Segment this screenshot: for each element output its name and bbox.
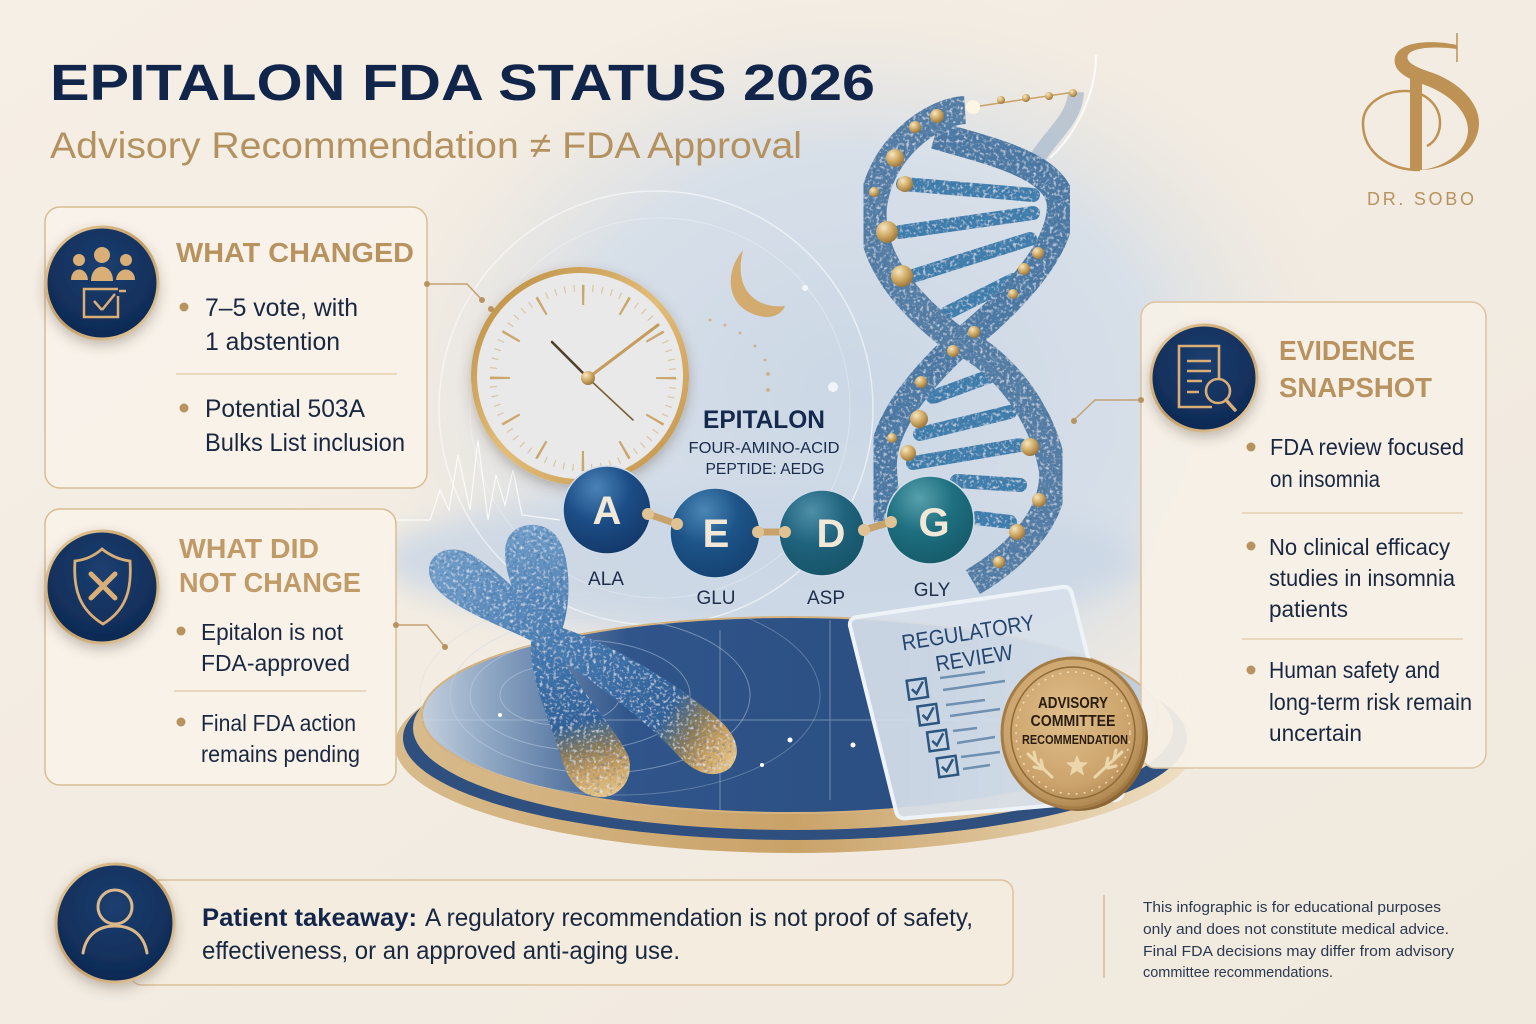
peptide chain: AEDG spheres: D: [817, 512, 845, 556]
icon: committee vote: [46, 227, 158, 339]
connector: what did not change to chromosome: [393, 622, 448, 650]
bullet list: Potential 503A: [205, 395, 365, 423]
bullet list: studies in insomnia: [1269, 565, 1456, 591]
disclaimer: [1104, 895, 1455, 981]
bullet list: uncertain: [1269, 720, 1362, 746]
disclaimer: committee recommendations.: [1143, 964, 1333, 981]
peptide chain: AEDG spheres: E: [703, 512, 729, 556]
clipboard: regulatory review: [850, 587, 1122, 818]
icon: document and magnifier: [1151, 325, 1257, 431]
bullet list: No clinical efficacy: [1269, 534, 1450, 560]
seal: advisory committee recommendation: ADVISORY: [1038, 695, 1109, 712]
heading: [1279, 335, 1432, 403]
peptide chain: AEDG spheres: A: [593, 489, 621, 533]
bullet list: [1242, 434, 1472, 746]
panel: evidence snapshot: [1141, 302, 1486, 768]
heading: [179, 533, 361, 598]
clipboard: regulatory review: REVIEW: [934, 640, 1015, 676]
title: EPITALON FDA STATUS 2026: [50, 54, 875, 111]
bullet list: [176, 294, 405, 457]
disclaimer: Final FDA decisions may differ from advisory: [1143, 943, 1455, 960]
icon: crescent moon: [731, 250, 785, 317]
clock hands: [552, 325, 658, 420]
peptide chain: AEDG spheres: GLY: [914, 580, 951, 601]
takeaway text: [202, 904, 973, 965]
panel: patient takeaway: [56, 864, 1013, 985]
bullet list: [174, 619, 366, 767]
icon: patient: [56, 864, 174, 982]
heading: WHAT DID: [179, 533, 319, 564]
panel: what changed: [45, 207, 427, 488]
logo: Dr. Sobo: DR. SOBO: [1367, 189, 1474, 209]
disclaimer: only and does not constitute medical advice.: [1143, 921, 1449, 938]
bullet list: Bulks List inclusion: [205, 429, 405, 457]
heartbeat line: [385, 440, 560, 520]
takeaway text: Patient takeaway:: [202, 904, 417, 932]
epitalon label: PEPTIDE: AEDG: [706, 461, 824, 478]
platform: [395, 595, 1195, 853]
bullet list: remains pending: [201, 741, 360, 767]
logo: Dr. Sobo: [1363, 33, 1479, 209]
glass dome and orbit rings: [439, 191, 1196, 770]
bullet list: Epitalon is not: [201, 619, 343, 645]
heading: SNAPSHOT: [1279, 372, 1432, 403]
bullet list: on insomnia: [1270, 466, 1381, 492]
peptide chain: AEDG spheres: G: [918, 501, 950, 545]
seal: advisory committee recommendation: RECOMMENDATION: [1022, 733, 1128, 747]
peptide chain: AEDG spheres: ALA: [588, 569, 624, 590]
bullet list: Final FDA action: [201, 710, 356, 736]
heading: EVIDENCE: [1279, 335, 1415, 366]
takeaway text: effectiveness, or an approved anti-aging use.: [202, 937, 680, 965]
epitalon label: EPITALON: [703, 406, 825, 434]
takeaway text: A regulatory recommendation is not proof of safety,: [425, 904, 973, 932]
disclaimer: This infographic is for educational purposes: [1143, 899, 1441, 916]
chromosome: [429, 525, 737, 797]
seal: advisory committee recommendation: COMMITTEE: [1030, 713, 1116, 730]
connector: evidence to DNA: [1071, 397, 1144, 424]
peptide chain: AEDG spheres: ASP: [807, 588, 845, 609]
bullet list: long-term risk remain: [1269, 689, 1472, 715]
heading: WHAT CHANGED: [176, 237, 414, 268]
clock: [471, 267, 689, 485]
epitalon label: [688, 406, 840, 478]
bullet list: 7–5 vote, with: [205, 294, 358, 322]
bullet list: FDA-approved: [201, 650, 350, 676]
subtitle: Advisory Recommendation ≠ FDA Approval: [50, 125, 802, 166]
panel: what did not change: [45, 509, 396, 785]
DNA helix: [869, 55, 1096, 582]
clipboard: regulatory review: REGULATORY: [900, 610, 1036, 655]
bullet list: Human safety and: [1269, 657, 1440, 683]
icon: shield with cross: [46, 531, 158, 643]
bullet list: patients: [1269, 596, 1348, 622]
bullet list: FDA review focused: [1270, 434, 1464, 460]
seal: advisory committee recommendation: [1002, 658, 1148, 811]
connector: what changed to clock: [424, 281, 494, 312]
bullet list: 1 abstention: [205, 328, 340, 356]
orbit dots: [708, 285, 838, 392]
heading: NOT CHANGE: [179, 567, 361, 598]
peptide chain: AEDG spheres: [563, 466, 974, 609]
peptide chain: AEDG spheres: GLU: [696, 588, 736, 609]
epitalon label: FOUR-AMINO-ACID: [688, 440, 840, 457]
